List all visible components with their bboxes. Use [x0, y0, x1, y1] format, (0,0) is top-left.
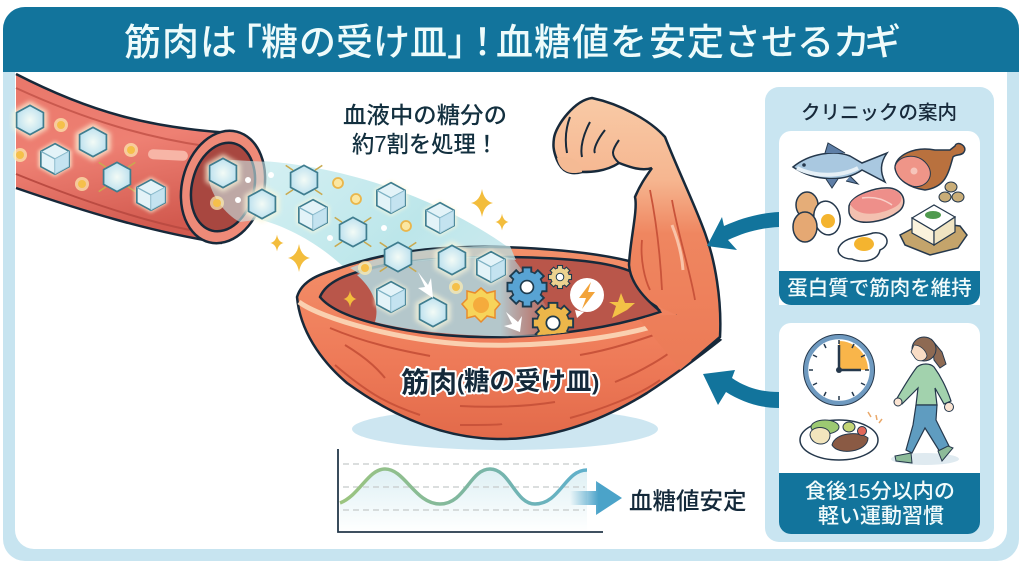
icon: ham	[895, 144, 965, 190]
icon: clock	[804, 334, 874, 406]
icon: steak	[849, 188, 904, 222]
caption bar: walk: 食後15分以内の	[805, 480, 955, 503]
label: muscle bowl	[401, 367, 599, 398]
arrow	[570, 481, 622, 515]
shadow under bowl	[352, 408, 658, 450]
bowl rim highlight	[299, 302, 682, 345]
stream over rim	[350, 246, 516, 274]
vessel opening	[169, 122, 277, 252]
caption bar: walk	[779, 473, 980, 534]
callout: 70% of blood sugar: 血液中の糖分の	[343, 102, 507, 128]
title banner: 筋肉は「糖の受け皿」！血糖値を安定させるカギ	[124, 22, 901, 63]
card: protein	[779, 131, 980, 305]
icon: beans	[939, 182, 964, 202]
label: muscle bowl: 筋肉	[401, 367, 457, 398]
caption bar: protein: 蛋白質で筋肉を維持	[787, 277, 972, 300]
bowl inner	[320, 257, 660, 337]
arrow: protein to arm	[707, 212, 779, 250]
icon: energy bubble	[570, 278, 604, 318]
icon: small gear	[548, 266, 572, 288]
icon: eggs	[793, 192, 843, 242]
label: 血糖値安定	[629, 488, 746, 514]
card: after meal walk	[779, 323, 980, 534]
label: muscle bowl: 糖の受け皿	[464, 368, 592, 396]
flexed arm	[553, 98, 720, 370]
blood sugar chart	[338, 449, 746, 532]
icon: burst	[462, 288, 500, 322]
label: muscle bowl: )	[592, 370, 599, 395]
caption bar: walk: 軽い運動習慣	[818, 505, 944, 528]
icon: blue gear	[507, 267, 547, 307]
stream overlay in opening	[208, 160, 270, 222]
callout: 70% of blood sugar: 約7割を処理！	[352, 131, 498, 157]
sparkles	[270, 189, 635, 318]
sugars entering bowl	[286, 165, 522, 332]
stream in bowl	[357, 257, 562, 336]
title banner	[3, 7, 1019, 72]
icon: walking person	[891, 337, 959, 465]
blood vessel	[12, 74, 280, 252]
muscle fibres	[330, 328, 678, 425]
label: muscle bowl: (	[457, 370, 465, 395]
panel: clinic guide	[765, 87, 994, 542]
sugar crystals in vessel	[12, 101, 280, 223]
icon: gold gear	[533, 303, 573, 343]
arrow: walk to bowl	[703, 370, 779, 408]
icon: fried egg	[838, 233, 887, 261]
muscle bowl	[297, 246, 720, 439]
icon: fish	[793, 143, 887, 188]
caption bar: protein	[779, 271, 980, 305]
icon: meal plate	[800, 412, 882, 460]
gears and energy	[462, 266, 604, 343]
panel heading: クリニックの案内	[801, 102, 957, 124]
icon: tofu	[900, 205, 967, 255]
sugar stream	[235, 160, 540, 325]
